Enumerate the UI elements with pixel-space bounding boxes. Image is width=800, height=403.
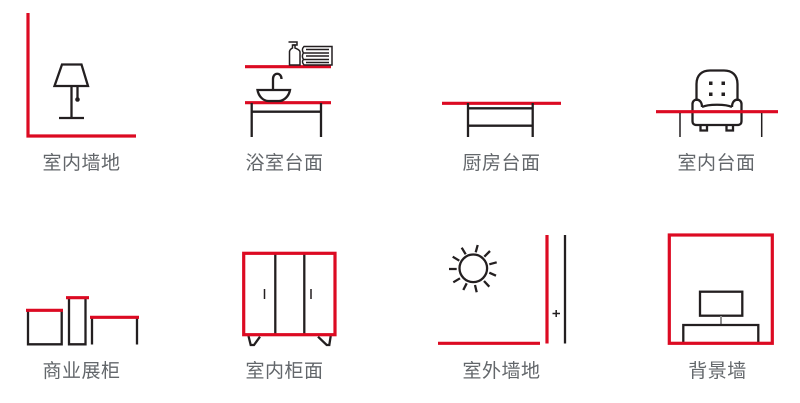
icon: armchair xyxy=(692,70,742,130)
red counter line xyxy=(656,110,778,113)
table frame xyxy=(468,103,533,137)
red wall and floor lines xyxy=(28,13,136,136)
red counter line xyxy=(442,102,561,105)
panel: indoor cabinet surface xyxy=(244,253,335,382)
red top lines xyxy=(26,298,139,317)
label: kitchen counter: 厨房台面 xyxy=(462,152,541,174)
label: indoor wall and floor: 室内墙地 xyxy=(42,152,121,174)
panel: commercial display cabinet xyxy=(26,298,139,382)
icon: sun xyxy=(449,245,497,292)
icon: bottle and towels xyxy=(288,42,332,65)
label: indoor cabinet surface: 室内柜面 xyxy=(245,360,324,382)
label: outdoor wall and floor: 室外墙地 xyxy=(462,360,541,382)
red wall outline xyxy=(669,235,772,343)
red floor and wall lines xyxy=(438,235,547,344)
red shelf and counter lines xyxy=(245,67,331,103)
panel: bathroom counter xyxy=(245,42,332,174)
table frame xyxy=(252,103,321,137)
label: indoor counter: 室内台面 xyxy=(677,152,756,174)
panel: feature wall xyxy=(669,235,772,382)
plus sign xyxy=(552,310,560,317)
icon: sink basin and faucet xyxy=(258,74,290,101)
table legs xyxy=(680,113,762,137)
label: commercial display cabinet: 商业展柜 xyxy=(42,360,121,382)
black wall line xyxy=(564,235,566,344)
red cabinet outline xyxy=(244,253,335,335)
panel: indoor counter xyxy=(656,70,778,174)
panel: outdoor wall and floor xyxy=(438,235,565,382)
icon: television and console xyxy=(683,292,758,343)
icon: table lamp xyxy=(54,64,88,118)
label: feature wall: 背景墙 xyxy=(688,360,747,382)
panel: indoor wall and floor xyxy=(28,13,136,174)
panel: kitchen counter xyxy=(442,103,561,174)
cabinet doors and handles xyxy=(275,253,304,335)
cabinet frames xyxy=(28,299,137,344)
cabinet legs xyxy=(248,336,331,345)
label: bathroom counter: 浴室台面 xyxy=(245,152,324,174)
